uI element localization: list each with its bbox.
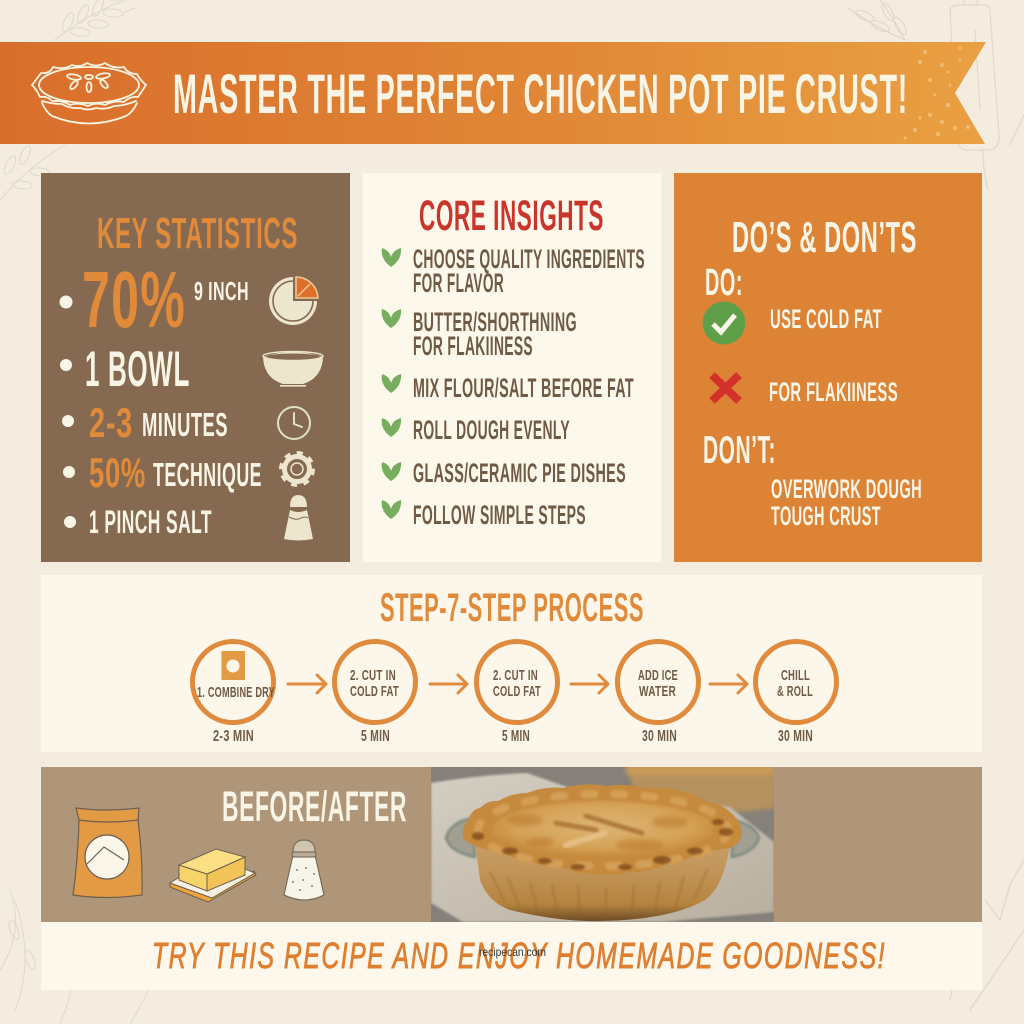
- top crust: [492, 801, 714, 857]
- stat: 70% 9 inch: 70%: [82, 255, 186, 344]
- panel background: [363, 173, 661, 562]
- stat: 50% technique: TECHNIQUE: [153, 456, 262, 493]
- don't items: TOUGH CRUST: [771, 501, 881, 531]
- stat: 1 bowl: [60, 341, 190, 397]
- step 4: 30 MIN: [642, 728, 677, 745]
- arrow: [710, 675, 747, 693]
- panel background: [674, 173, 982, 562]
- arrow: [288, 675, 326, 693]
- icon: flour bag: [73, 808, 142, 898]
- step 4: ADD ICE: [638, 667, 678, 684]
- insight: simple steps: [382, 500, 586, 530]
- panel background: [41, 767, 982, 922]
- linen cloth: [431, 773, 774, 922]
- heading: BEFORE/AFTER: [222, 783, 407, 831]
- icon: check mark: [702, 302, 746, 344]
- dish handles: [446, 818, 759, 857]
- stat: 1 pinch salt: [64, 504, 212, 540]
- title banner: [0, 42, 986, 144]
- photo: baked pot pie: [431, 764, 776, 922]
- photo backdrop: [431, 767, 774, 922]
- panel background: [41, 173, 350, 562]
- icon: clock: [278, 407, 310, 439]
- browned top patches: [507, 814, 688, 851]
- stat: 70% 9 inch: 9 INCH: [194, 276, 249, 306]
- step 2: 5 MIN: [361, 728, 390, 745]
- step 1: 1. COMBINE DRY: [197, 684, 275, 701]
- banner speckles: [904, 46, 970, 140]
- step 2: COLD FAT: [350, 683, 399, 700]
- insight: pie dishes: [382, 458, 626, 488]
- step 5: CHILL: [781, 667, 810, 684]
- icon: pie: [32, 63, 146, 124]
- arrow: [430, 675, 467, 693]
- insight: pie dishes: GLASS/CERAMIC PIE DISHES: [413, 458, 626, 488]
- decorative wheat and rolling pin right: [848, 0, 1024, 1010]
- step 2: 2. CUT IN: [350, 667, 396, 684]
- panel: key statistics: [41, 173, 350, 562]
- crust rim: [463, 784, 742, 875]
- stat: 1 pinch salt: 1 PINCH SALT: [89, 504, 212, 540]
- insight: simple steps: FOLLOW SIMPLE STEPS: [413, 500, 586, 530]
- subheading: don't: DON’T:: [703, 429, 776, 472]
- call to action panel: [41, 922, 982, 990]
- insight: quality ingredients: [382, 244, 645, 298]
- step 3: 2. CUT IN: [493, 667, 538, 684]
- step 2: [334, 642, 416, 745]
- step 3: COLD FAT: [493, 683, 541, 700]
- icon: salt shaker: [284, 840, 324, 900]
- step 3: 5 MIN: [502, 728, 530, 745]
- dish flutes: [490, 868, 708, 906]
- insight: mix flour: [382, 373, 634, 403]
- panel background: [41, 575, 982, 752]
- stat: 2-3 minutes: 2-3: [89, 399, 133, 446]
- step 1: 2-3 MIN: [213, 728, 254, 745]
- insight: butter: [382, 307, 577, 361]
- heading: CORE INSIGHTS: [419, 192, 604, 240]
- step 1: [192, 642, 275, 745]
- insight: quality ingredients: FOR FLAVOR: [413, 268, 504, 298]
- do item: USE COLD FAT: [770, 304, 882, 334]
- step 4: WATER: [639, 683, 676, 700]
- stat: 2-3 minutes: [62, 399, 228, 446]
- stat: 50% technique: [63, 449, 262, 496]
- panel: core insights: [363, 173, 661, 562]
- insight: mix flour: MIX FLOUR/SALT BEFORE FAT: [413, 373, 634, 403]
- icon: butter: [170, 849, 256, 902]
- panel: before and after: [41, 764, 982, 922]
- crust crimps: [478, 794, 728, 866]
- dish body: [476, 846, 730, 922]
- insight: roll dough: ROLL DOUGH EVENLY: [413, 415, 570, 445]
- stat: 2-3 minutes: MINUTES: [142, 406, 228, 443]
- insight: butter: BUTTER/SHORTHNING: [413, 307, 577, 337]
- icon: pie chart: [269, 277, 318, 325]
- step 3: [476, 642, 558, 745]
- top crust vents: [556, 816, 642, 845]
- pie in background: [626, 764, 776, 812]
- icon: bowl: [263, 352, 323, 387]
- subheading: do: DO:: [705, 262, 743, 304]
- arrow: [571, 675, 608, 693]
- panel: do's and don'ts: [674, 173, 982, 562]
- step 5: & ROLL: [777, 683, 813, 700]
- icon: salt shaker: [284, 495, 313, 540]
- watermark: recipecan.com: [479, 945, 546, 959]
- panel: process steps: [41, 575, 982, 752]
- icon: flour bag: [222, 651, 245, 680]
- panel background: [41, 922, 982, 990]
- cross item: FOR FLAKIINESS: [769, 377, 898, 407]
- stat: 1 bowl: 1 BOWL: [85, 341, 190, 397]
- heading: STEP-7-STEP PROCESS: [380, 586, 644, 630]
- don't items: [771, 474, 922, 531]
- insight: roll dough: [382, 415, 570, 445]
- icon: red cross: [712, 375, 739, 401]
- step 4: [618, 642, 698, 745]
- icon: gear: [281, 453, 313, 485]
- banner ribbon: [0, 42, 986, 144]
- browned crust spots: [472, 819, 733, 870]
- step 5: 30 MIN: [778, 728, 813, 745]
- stat: 50% technique: 50%: [89, 449, 146, 496]
- decorative wheat top left: [0, 0, 155, 1024]
- insight: quality ingredients: CHOOSE QUALITY INGREDIENTS: [413, 244, 645, 274]
- step 5: [756, 642, 836, 745]
- heading: KEY STATISTICS: [97, 209, 298, 258]
- insight: butter: FOR FLAKIINESS: [413, 331, 533, 361]
